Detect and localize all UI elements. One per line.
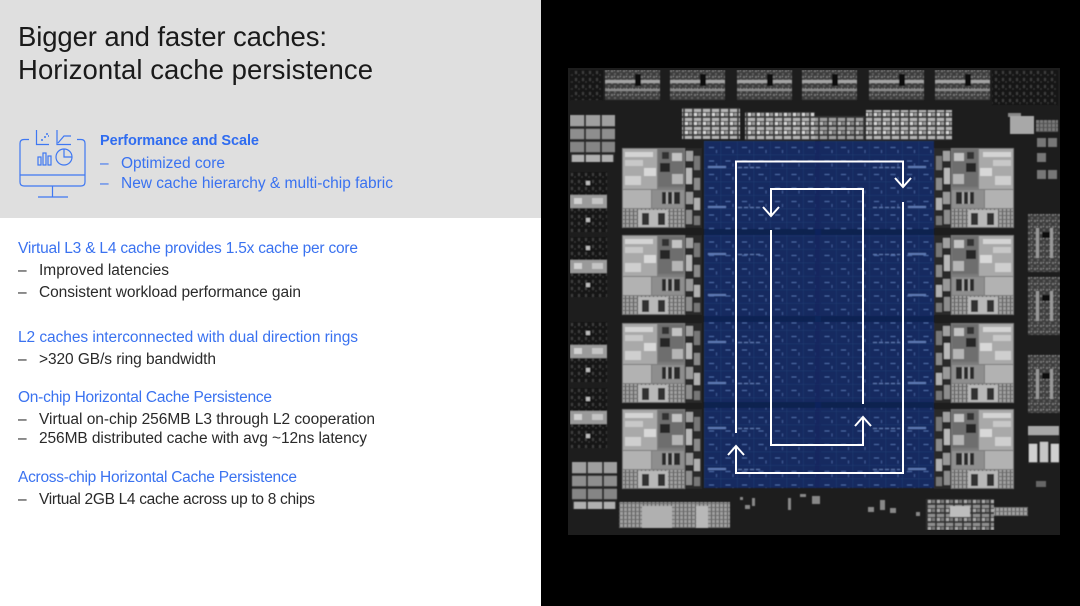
callout: performance and scale: Performance and Scale (100, 133, 259, 149)
text block: L2 rings (18, 329, 358, 368)
title (18, 21, 373, 85)
right I/O column (1008, 113, 1060, 487)
blue L2 cache region (704, 141, 934, 488)
text block: L2 rings: – (18, 351, 27, 368)
arrow: inner ring (763, 189, 871, 445)
text block: on-chip persistence: – (18, 430, 27, 447)
text block: L2 rings: L2 caches interconnected with dual direction rings (18, 329, 358, 346)
text block: virtual L3 and L4: Virtual L3 & L4 cache provides 1.5x cache per core (18, 240, 358, 257)
core blocks right (934, 148, 1014, 489)
panel: chip die photo (541, 0, 1080, 606)
text block: virtual L3 and L4: – (18, 284, 27, 301)
callout: performance and scale: – (100, 155, 109, 172)
text block: on-chip persistence: On-chip Horizontal Cache Persistence (18, 389, 272, 406)
callout: performance and scale: Optimized core (121, 155, 225, 172)
text block: across-chip persistence: Across-chip Horizontal Cache Persistence (18, 469, 297, 486)
text block: virtual L3 and L4: – (18, 262, 27, 279)
icon: monitor with charts (20, 130, 85, 197)
core blocks left (622, 148, 702, 489)
callout: performance and scale: – (100, 175, 109, 192)
text block: across-chip persistence: – (18, 491, 27, 508)
text block: virtual L3 and L4: Consistent workload performance gain (39, 284, 301, 301)
text block: virtual L3 and L4: Improved latencies (39, 262, 169, 279)
top cache cell band (682, 108, 952, 140)
left I/O column (570, 115, 617, 509)
title: Horizontal cache persistence (18, 54, 373, 85)
callout: performance and scale (100, 133, 393, 192)
panel: text body (0, 218, 541, 606)
text block: across-chip persistence (18, 469, 315, 508)
text block: on-chip persistence (18, 389, 375, 447)
title: Bigger and faster caches: (18, 21, 327, 52)
text block: on-chip persistence: – (18, 411, 27, 428)
text block: L2 rings: >320 GB/s ring bandwidth (39, 351, 216, 368)
bottom right cells (926, 499, 1028, 530)
text block: virtual L3 and L4 (18, 240, 358, 301)
arrow: outer ring (728, 162, 911, 473)
bottom left cells (619, 502, 730, 528)
callout: performance and scale: New cache hierarchy & multi-chip fabric (121, 175, 393, 192)
text block: on-chip persistence: 256MB distributed cache with avg ~12ns latency (39, 430, 367, 447)
text block: across-chip persistence: Virtual 2GB L4 cache across up to 8 chips (39, 491, 315, 508)
text block: on-chip persistence: Virtual on-chip 256MB L3 through L2 cooperation (39, 411, 375, 428)
panel: header (0, 0, 541, 218)
bottom middle sparse cells (740, 494, 920, 516)
die blocks (570, 70, 1060, 530)
top I/O blocks (570, 70, 1058, 105)
